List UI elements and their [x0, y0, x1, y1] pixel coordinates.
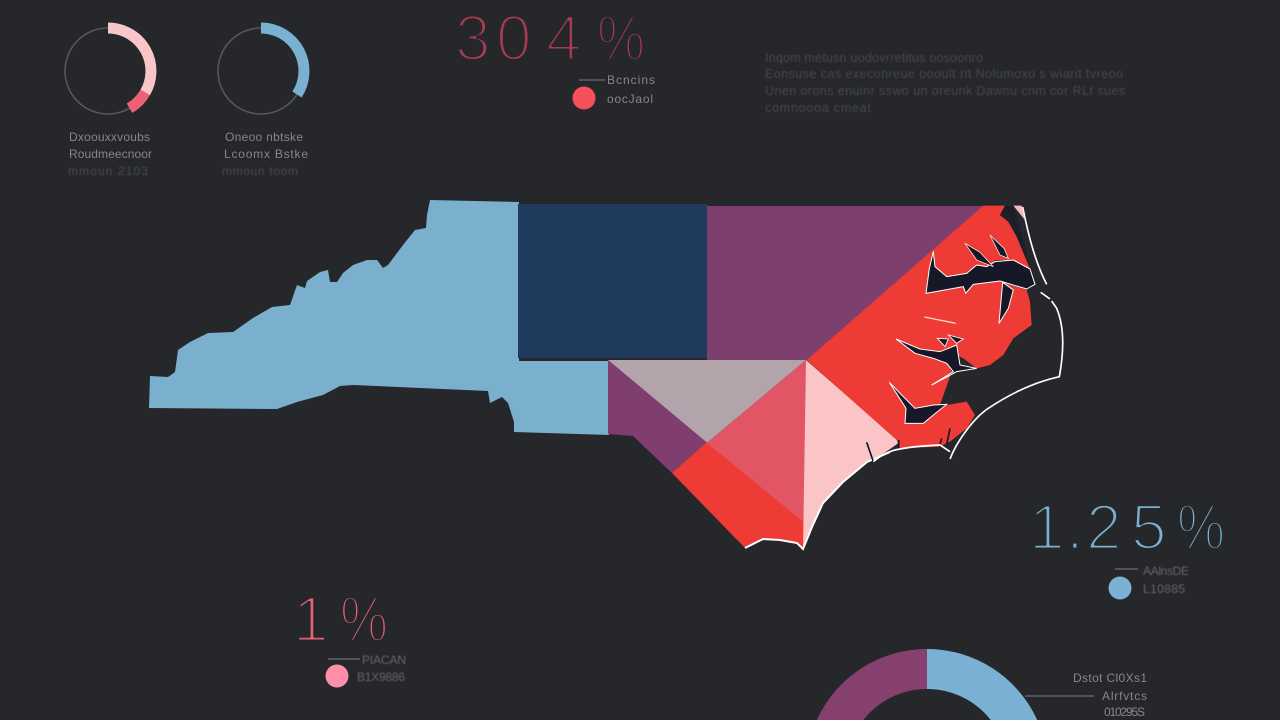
panel: blue ring stat: [218, 28, 308, 178]
text block: description paragraph: [765, 51, 1125, 115]
stat: 1 percent: [293, 583, 406, 688]
region: navy block: [518, 204, 708, 358]
legend dot: [326, 664, 348, 688]
region: purple block: [707, 206, 983, 360]
text block: description paragraph: Inqom metusn uodovrretitus oosoonro: [765, 51, 983, 65]
region: pink triangle: [803, 360, 900, 550]
stat number: %: [340, 583, 388, 655]
legend text: B1X9886: [357, 670, 405, 684]
legend text: L10885: [1143, 582, 1185, 596]
legend text: AAlnsDE: [1143, 564, 1189, 578]
ring arc: rose segment: [130, 92, 145, 108]
barrier islands: [950, 207, 1063, 459]
inlet: upper wedge: [1000, 206, 1030, 267]
coastline: southern white edge: [745, 452, 890, 549]
ring track: [65, 28, 151, 114]
inlet: central finger: [999, 282, 1013, 323]
region: rose quad: [707, 360, 806, 524]
legend text: oocJaol: [607, 92, 653, 106]
chart: bottom donut: [817, 649, 1147, 720]
donut label: [1073, 671, 1147, 719]
inlet: white sliver: [924, 317, 956, 323]
stat number: %: [597, 2, 645, 74]
donut: blue half: [927, 649, 1037, 720]
region: grey triangle: [608, 360, 806, 443]
coastline: south: [873, 445, 950, 462]
ring arc: blue segment: [261, 28, 304, 94]
legend text: Bcncins: [607, 73, 655, 87]
donut: purple half: [817, 649, 927, 720]
donut label: 010295S: [1104, 705, 1145, 719]
leader line: [328, 658, 360, 660]
stat number: 1.25: [1029, 491, 1167, 563]
text block: description paragraph: Unen orons enuinr sswo un oreunk Dawnu cnm cor RLt sues: [765, 84, 1125, 98]
ring arc: light pink segment: [108, 28, 151, 92]
ring label: [222, 130, 308, 178]
donut label: Alrfvtcs: [1102, 689, 1147, 703]
ring label: Roudmeecnoor: [69, 147, 152, 161]
legend text: [357, 653, 406, 684]
region: small purple: [608, 360, 708, 473]
inlet: Pamlico river: [896, 339, 977, 385]
region: western blue: [149, 200, 609, 435]
ring label: mmoun 2103: [68, 164, 148, 178]
coastal reeds: [867, 428, 950, 462]
top sliver: [1013, 206, 1025, 220]
ring label: Oneoo nbtske: [225, 130, 303, 144]
legend dot: [572, 86, 596, 110]
legend dot: [1108, 576, 1132, 600]
ring label: [68, 130, 152, 178]
ring label: Dxoouxxvoubs: [69, 130, 150, 144]
stat number: 1: [293, 583, 329, 655]
stat number: %: [1177, 491, 1225, 563]
legend text: [1143, 564, 1189, 596]
region: eastern red with sounds: [807, 206, 1063, 462]
region: lower red: [672, 442, 806, 550]
text block: description paragraph: Eonsuse cas execonreue oooult rit Nolumoxo s wiarit tvreoo: [765, 67, 1123, 81]
text block: description paragraph: comnoooa cmeat: [765, 101, 872, 115]
ring label: mmoun toom: [222, 164, 298, 178]
red mainland: [807, 206, 1032, 448]
leader line: [1025, 695, 1094, 697]
leader line: [1115, 568, 1138, 570]
stat number: [455, 2, 645, 74]
stat number: [293, 583, 388, 655]
donut label: Dstot Cl0Xs1: [1073, 671, 1147, 685]
panel: pink ring stat: [65, 28, 152, 178]
stat: 304 percent: [455, 2, 655, 110]
stat number: 304: [455, 2, 582, 74]
legend text: [607, 73, 655, 106]
leader line: [579, 79, 605, 81]
sound: northern bay: [926, 252, 1035, 293]
ring track: [218, 28, 304, 114]
legend text: PIACAN: [362, 653, 406, 667]
map: state divided into coloured regions: [149, 200, 1063, 550]
ring label: Lcoomx Bstke: [224, 147, 308, 161]
inlet: Neuse river: [889, 382, 947, 423]
inlet: north fingers: [965, 235, 1008, 267]
inlet: small spots: [937, 335, 963, 347]
stat: 1.25 percent: [1029, 491, 1225, 600]
